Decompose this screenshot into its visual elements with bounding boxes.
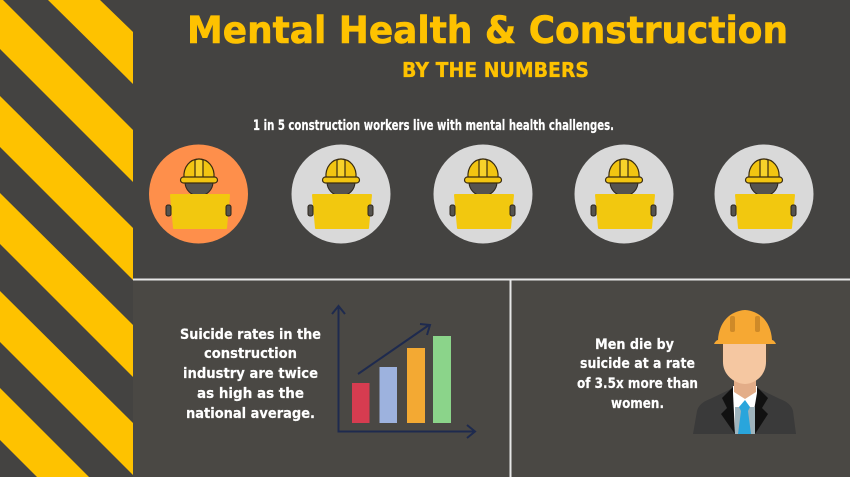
text: suicide rates: Suicide rates in the xyxy=(180,327,321,343)
text: suicide rates: as high as the xyxy=(197,386,304,402)
text: men die by suicide: of 3.5x more than xyxy=(577,376,698,392)
text: men die by suicide: women. xyxy=(611,396,664,412)
icon: worker 5 xyxy=(714,144,814,244)
title: Mental Health & Construction xyxy=(187,9,788,52)
icon: worker 4 xyxy=(574,144,674,244)
text: men die by suicide: Men die by xyxy=(595,337,674,353)
lower panels background xyxy=(133,280,850,477)
icon: worker 3 xyxy=(434,144,532,244)
icon row: five workers xyxy=(149,144,814,244)
statistic: 1 in 5: 1 in 5 construction workers live with mental health challenges. xyxy=(253,118,614,134)
text: men die by suicide: suicide at a rate xyxy=(580,356,695,372)
text: men die by suicide xyxy=(577,337,698,412)
icon: highlighted worker xyxy=(149,144,248,244)
text: suicide rates xyxy=(180,327,321,422)
hazard stripes xyxy=(0,0,133,477)
icon: man with hard hat xyxy=(693,310,796,434)
subtitle: BY THE NUMBERS xyxy=(402,58,589,82)
text: suicide rates: construction xyxy=(204,346,297,362)
bar chart xyxy=(332,306,475,438)
text: suicide rates: national average. xyxy=(186,406,315,422)
icon: worker 2 xyxy=(292,144,390,244)
text: suicide rates: industry are twice xyxy=(183,366,318,382)
